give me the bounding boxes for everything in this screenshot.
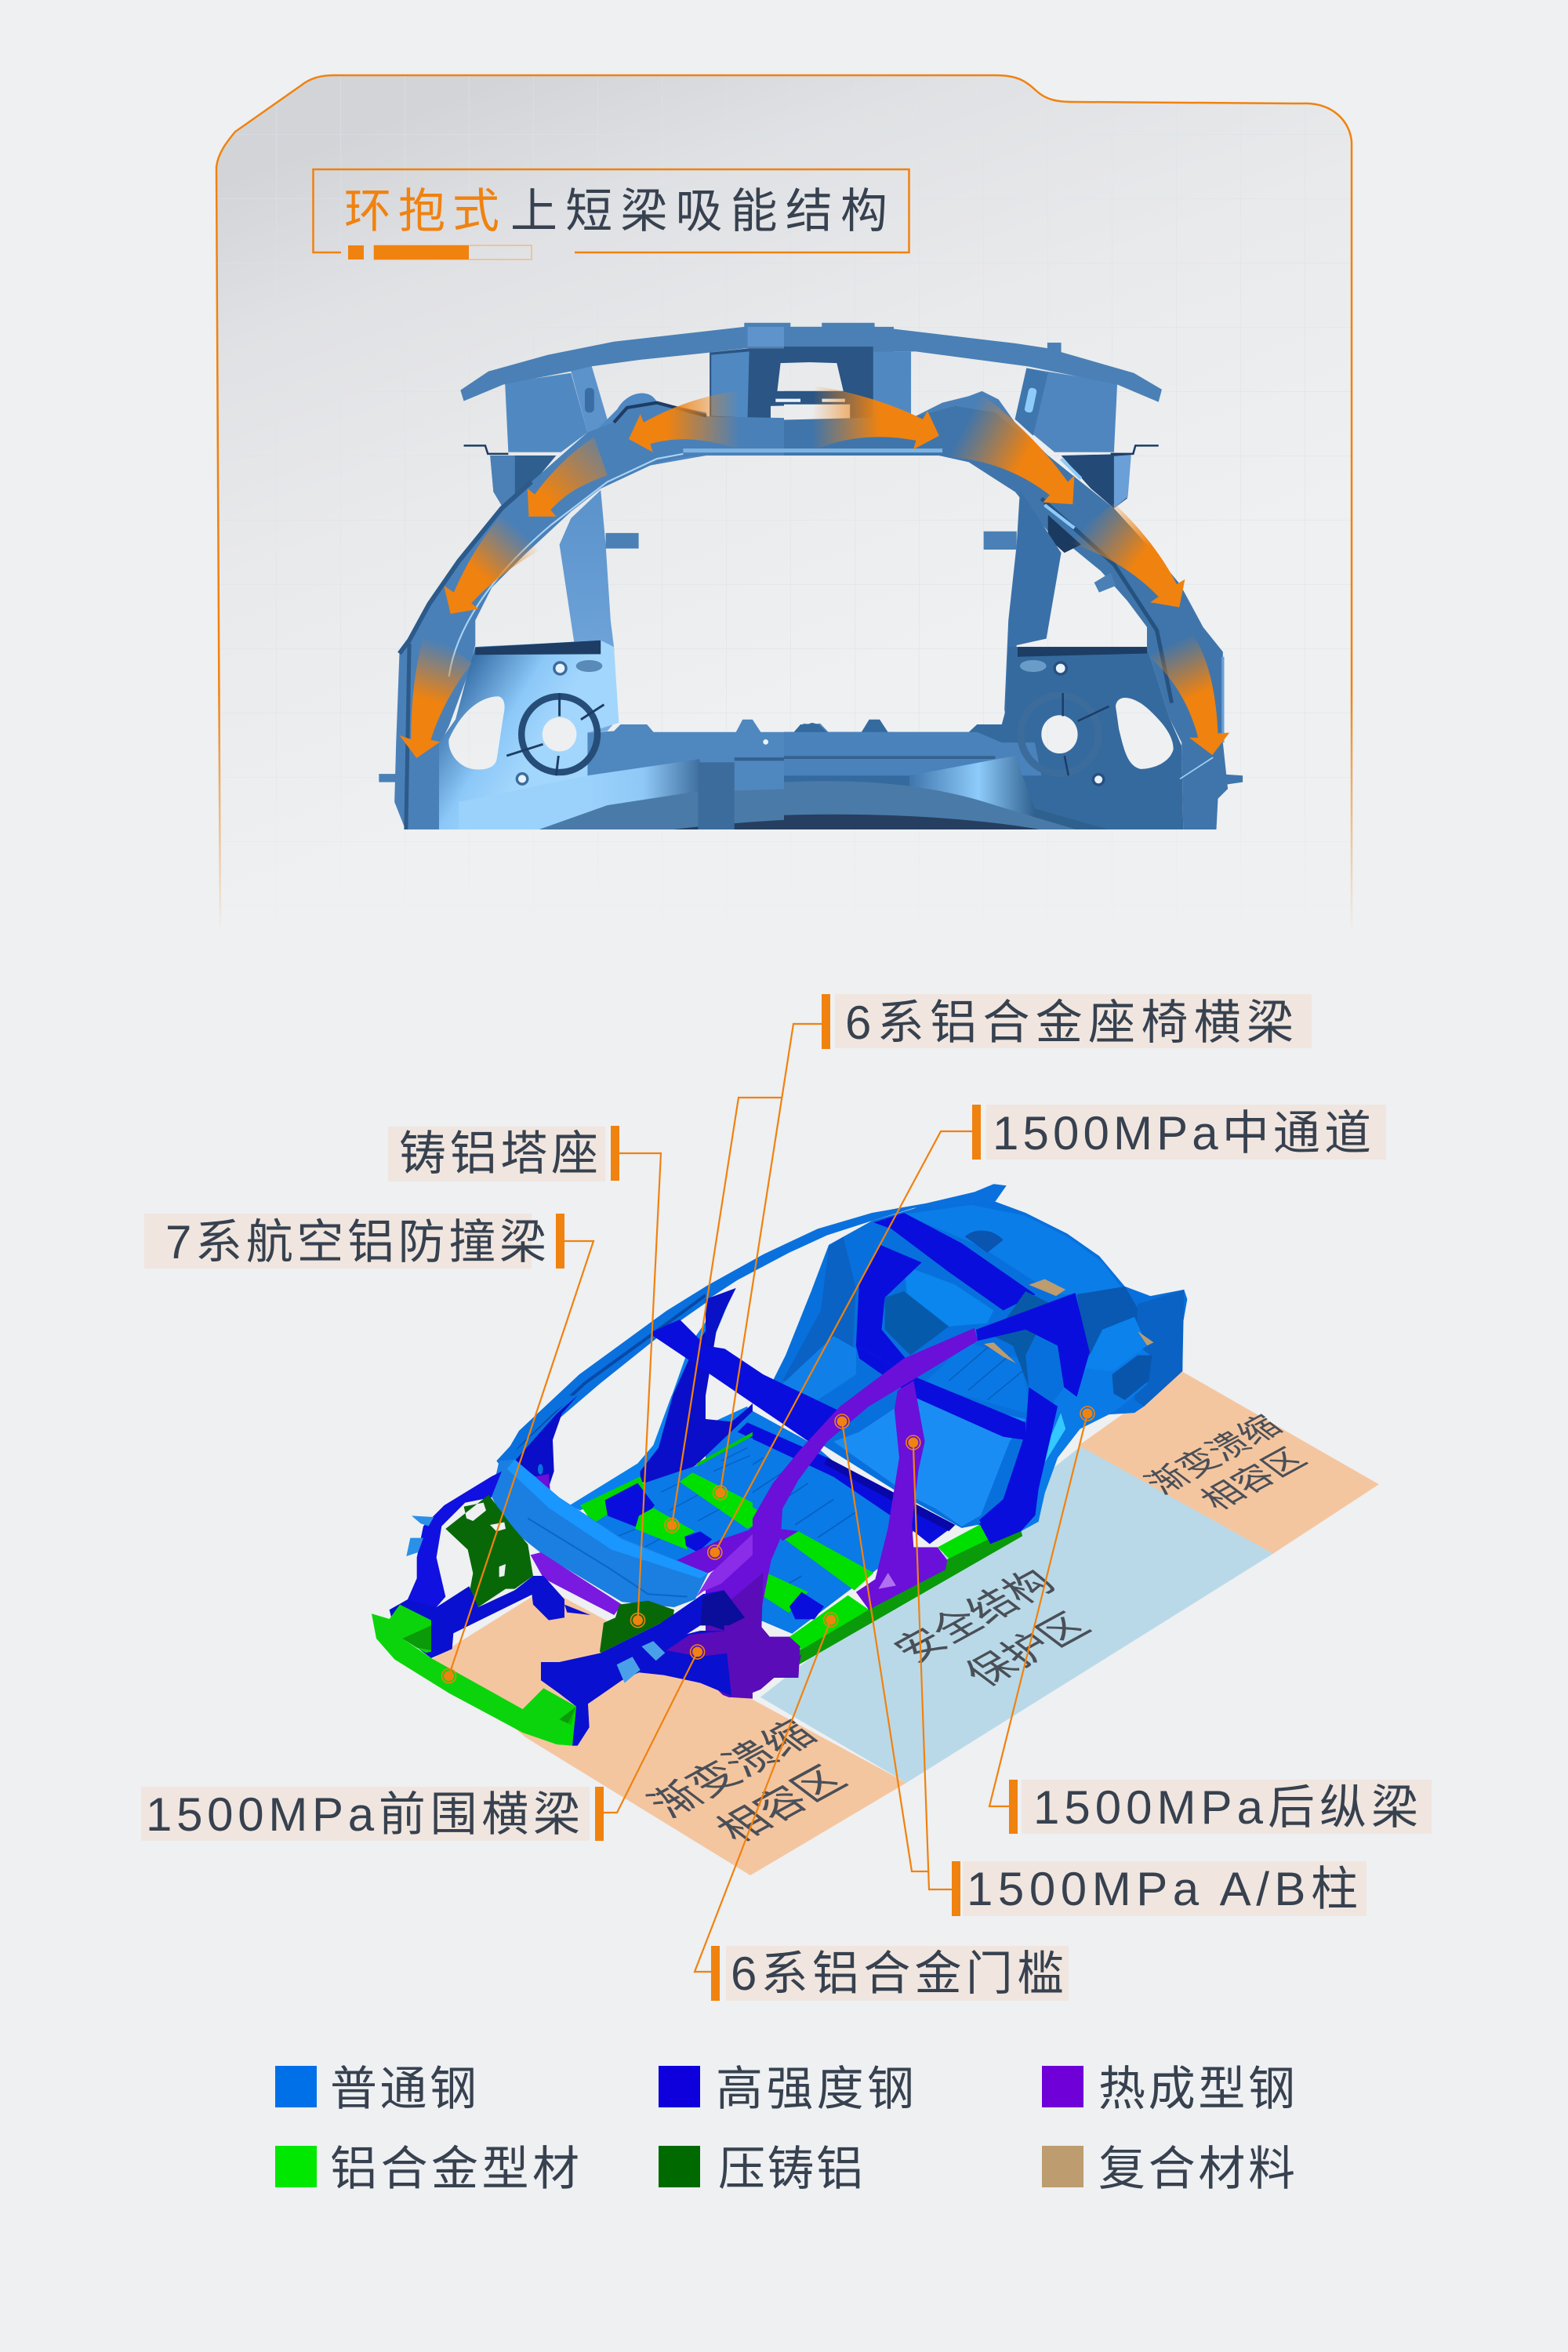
- arrows: energy paths right: [811, 387, 1229, 755]
- callout: 1500MPa中通道: 1500MPa中通道: [993, 1107, 1371, 1160]
- zone labels: safety structure protection zone: [884, 1563, 1100, 1693]
- panel: upper structure card: [216, 75, 1352, 933]
- zone labels: rear crumple zone: 相容区: [1193, 1443, 1315, 1516]
- legend item: 压铸铝: 压铸铝: [718, 2143, 863, 2195]
- callout: 7系航空铝防撞梁: 7系航空铝防撞梁: [165, 1216, 546, 1269]
- heading: ring-type upper short beam energy absorption: [314, 169, 909, 260]
- legend item: 复合材料: 复合材料: [1098, 2143, 1295, 2195]
- callout: 1500MPa前围横梁: 1500MPa前围横梁: [146, 1788, 580, 1841]
- car: front section: [372, 1396, 753, 1746]
- legend item: 热成型钢: 热成型钢: [1098, 2063, 1295, 2115]
- legend item: 铝合金型材: 铝合金型材: [330, 2143, 579, 2195]
- structure: right half: [784, 327, 1243, 831]
- callout: 1500MPa后纵梁: 1500MPa后纵梁: [1033, 1781, 1418, 1834]
- car: windshield frame, far pillars and roof rail: [499, 1287, 734, 1465]
- car: mid and rear body: [706, 1184, 1187, 1678]
- zone: safety cell: [760, 1446, 1273, 1783]
- zone labels: safety structure protection zone: 安全结构: [884, 1563, 1065, 1669]
- callout: 6系铝合金门槛: 6系铝合金门槛: [731, 1947, 1064, 2000]
- structure: left half: [379, 323, 894, 831]
- legend item: 高强度钢: 高强度钢: [716, 2063, 914, 2115]
- zone labels: rear crumple zone: 渐变溃缩: [1138, 1410, 1290, 1500]
- car: purple rocker base: [706, 1654, 801, 1697]
- zone labels: front crumple zone: 渐变溃缩: [638, 1713, 826, 1824]
- diagram: front structure: [379, 323, 1243, 831]
- callout: 6系铝合金座椅横梁: 6系铝合金座椅横梁: [845, 996, 1294, 1049]
- heading: ring-type upper short beam energy absorption: 环抱式: [344, 185, 499, 238]
- leader lines: [448, 1024, 1087, 1972]
- legend item: 普通钢: 普通钢: [330, 2063, 477, 2115]
- arrows: energy paths left: [399, 391, 739, 758]
- zone: front crumple: [432, 1588, 906, 1875]
- legend: [275, 2063, 1295, 2195]
- callout: 1500MPa A/B柱: 1500MPa A/B柱: [967, 1863, 1358, 1915]
- zone labels: safety structure protection zone: 保护区: [955, 1606, 1100, 1693]
- markers: [442, 1406, 1094, 1683]
- diagram: ground zones: [432, 1372, 1379, 1875]
- zone: rear crumple: [1079, 1372, 1379, 1554]
- zone labels: front crumple zone: 相容区: [706, 1759, 857, 1849]
- heading: ring-type upper short beam energy absorption: 上短梁吸能结构: [510, 185, 887, 238]
- callout: 铸铝塔座: 铸铝塔座: [399, 1127, 598, 1180]
